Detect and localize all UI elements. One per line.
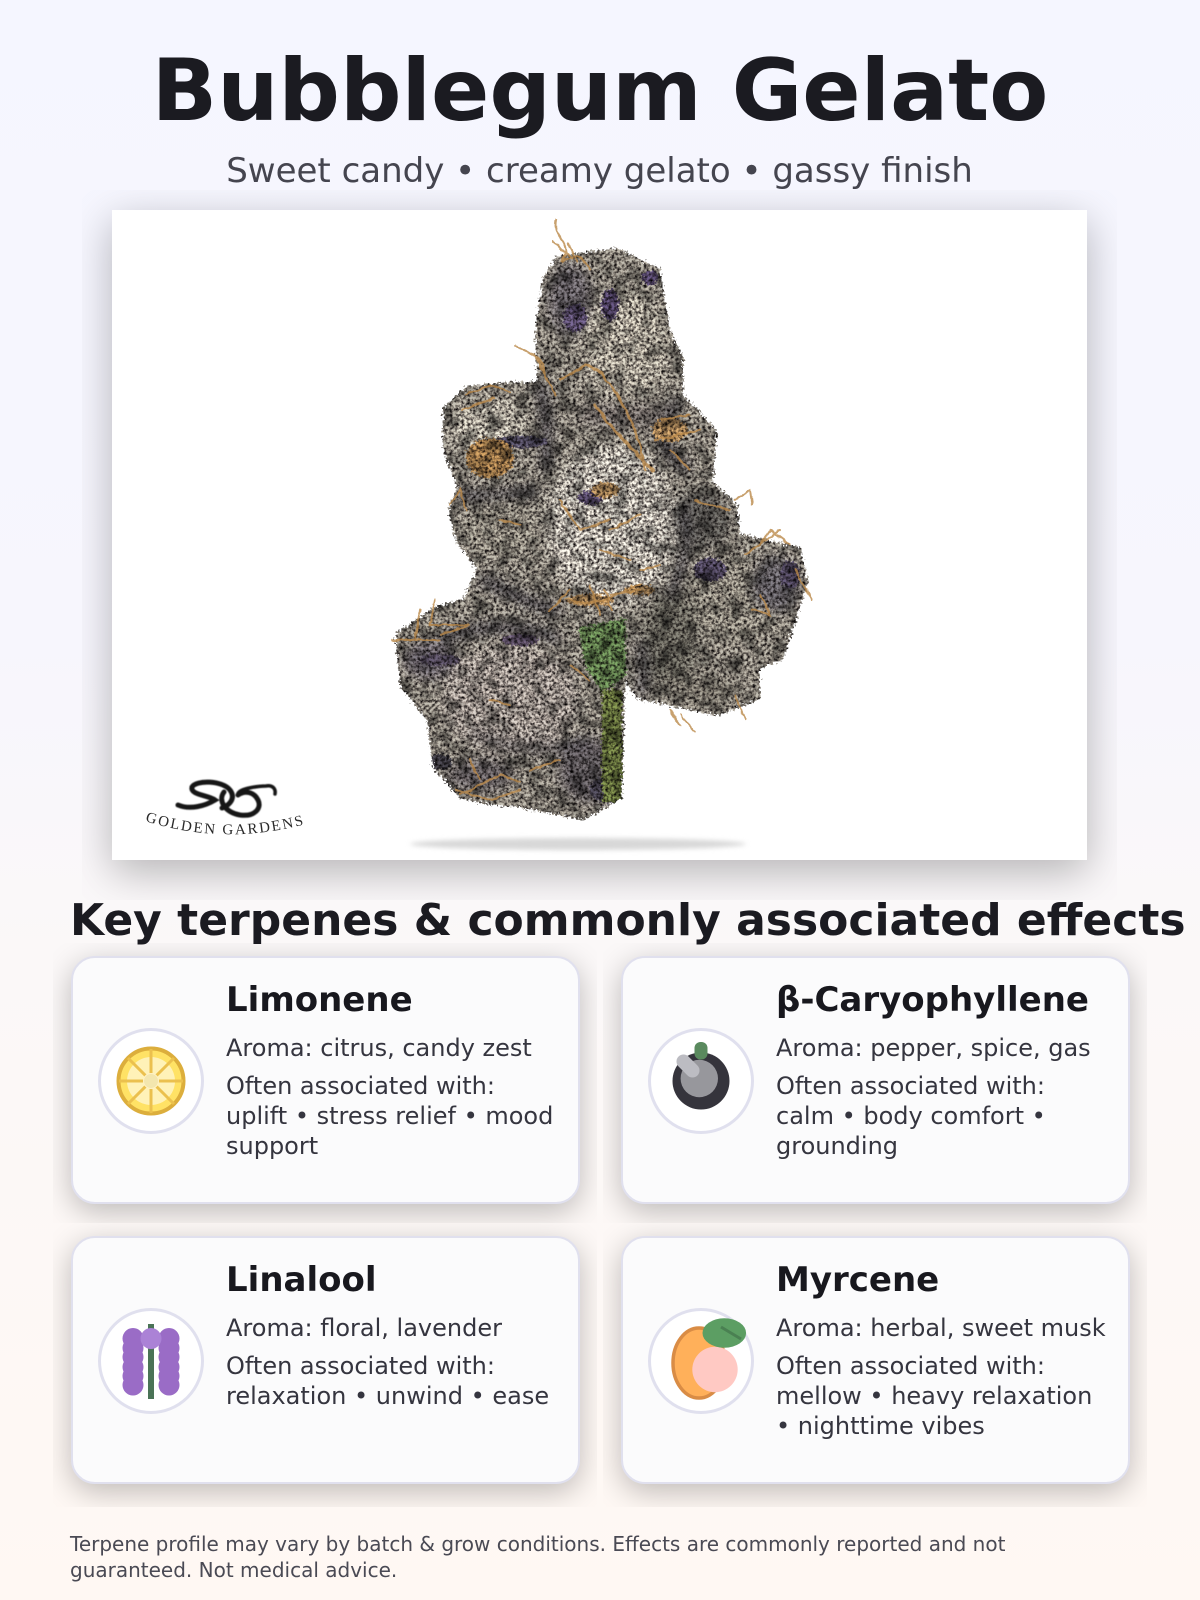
aroma: Aroma: pepper, spice, gas — [776, 1034, 1091, 1062]
effects: mellow • heavy relaxation — [776, 1382, 1092, 1410]
aroma: Aroma: citrus, candy zest — [226, 1034, 532, 1062]
hero image panel — [88, 198, 1111, 896]
card: Beta-Caryophyllene — [605, 948, 1146, 1223]
orange pistil hairs — [392, 220, 812, 800]
name: β-Caryophyllene — [776, 980, 1089, 1020]
card: Limonene — [55, 948, 596, 1223]
title: Bubblegum Gelato — [152, 41, 1048, 141]
Golden Gardens logo — [146, 778, 302, 834]
green leaf — [578, 618, 626, 692]
subtitle: Sweet candy • creamy gelato • gassy finish — [226, 151, 973, 191]
dark creases between nugs — [440, 382, 690, 748]
icon: peppercorn — [648, 1028, 754, 1134]
card: Myrcene — [605, 1228, 1146, 1507]
card: Linalool — [55, 1228, 596, 1507]
effects — [776, 1072, 1046, 1160]
name: Linalool — [226, 1260, 376, 1300]
effects: relaxation • unwind • ease — [226, 1382, 549, 1410]
effects: grounding — [776, 1132, 898, 1160]
disclaimer footer: Terpene profile may vary by batch & grow conditions. Effects are commonly reported and not — [70, 1532, 1005, 1556]
effects: Often associated with: — [776, 1072, 1045, 1100]
icon: lavender — [98, 1308, 204, 1414]
effects — [776, 1352, 1092, 1440]
aroma: Aroma: herbal, sweet musk — [776, 1314, 1106, 1342]
effects: Often associated with: — [776, 1352, 1045, 1380]
section heading: Key terpenes & commonly associated effects — [70, 895, 1186, 946]
Golden Gardens logo: GOLDEN GARDENS — [146, 812, 302, 834]
icon: mango — [648, 1308, 754, 1414]
effects: calm • body comfort • — [776, 1102, 1046, 1130]
disclaimer footer — [70, 1532, 1005, 1582]
cannabis bud photo — [380, 220, 830, 850]
ground shadow — [410, 838, 746, 850]
effects: support — [226, 1132, 318, 1160]
effects: • nighttime vibes — [776, 1412, 985, 1440]
effects: Often associated with: — [226, 1072, 495, 1100]
name: Limonene — [226, 980, 413, 1020]
name: Myrcene — [776, 1260, 939, 1300]
effects — [226, 1072, 553, 1160]
effects — [226, 1352, 549, 1410]
bud body — [393, 246, 809, 821]
effects: Often associated with: — [226, 1352, 495, 1380]
orange calyx patches — [466, 438, 514, 478]
effects: uplift • stress relief • mood — [226, 1102, 553, 1130]
purple sugar leaves — [563, 304, 587, 332]
disclaimer footer: guaranteed. Not medical advice. — [70, 1558, 397, 1582]
aroma: Aroma: floral, lavender — [226, 1314, 502, 1342]
icon: lemon slice — [98, 1028, 204, 1134]
stem — [602, 690, 622, 802]
